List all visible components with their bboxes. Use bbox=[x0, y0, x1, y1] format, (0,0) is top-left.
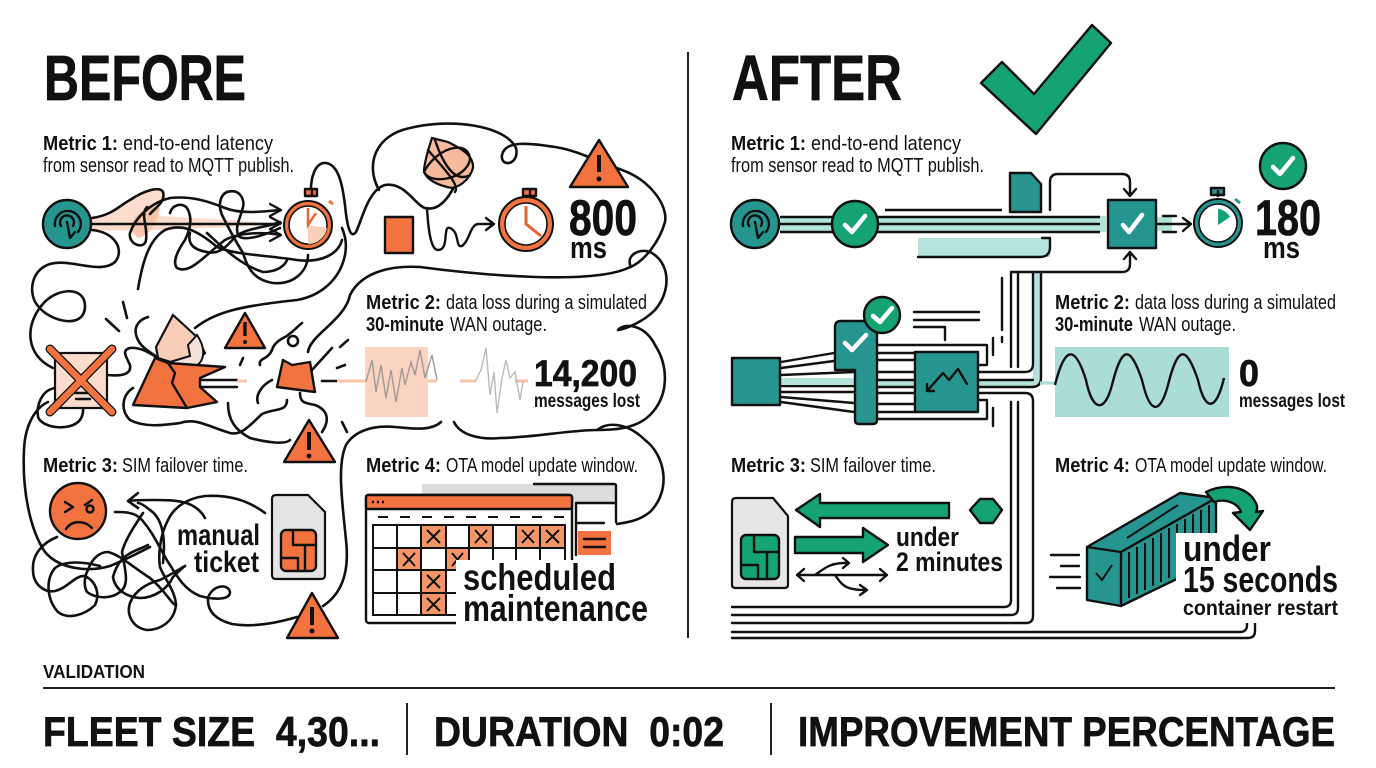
icon: checked square bbox=[1108, 200, 1156, 248]
text: metric 4 label bbox=[1055, 455, 1327, 477]
text: metric 2 label bbox=[366, 292, 647, 336]
tangled wires manual ticket bbox=[33, 493, 297, 630]
icon: source block bbox=[732, 358, 780, 405]
metric: 800 ms: ms bbox=[570, 230, 607, 265]
text: under 15 seconds container restart bbox=[1176, 528, 1346, 623]
icon: SIM card bbox=[272, 495, 325, 579]
text: metric 2 label: 30-minute bbox=[1055, 314, 1133, 336]
icon: diamond bbox=[970, 499, 1002, 523]
tangled wires before bbox=[24, 124, 666, 606]
text: manual ticket: manual bbox=[177, 519, 260, 552]
icon: warning bottom bbox=[287, 593, 338, 638]
text: metric 3 label: Metric 3: bbox=[43, 455, 118, 477]
text: under 15 seconds container restart: under bbox=[1183, 528, 1271, 569]
text: under 15 seconds container restart: 15 seconds bbox=[1183, 559, 1338, 600]
icon: check circle bbox=[832, 201, 878, 247]
text: metric 3 label: SIM failover time. bbox=[810, 455, 936, 477]
icon: stopwatch 2 bbox=[499, 189, 553, 251]
panel: after bbox=[731, 25, 1346, 638]
text: under 15 seconds container restart: container restart bbox=[1183, 597, 1338, 620]
text: metric 2 label: data loss during a simulated bbox=[446, 292, 647, 314]
icon: big check bbox=[981, 25, 1111, 134]
text: metric 1 label: from sensor read to MQTT publish. bbox=[731, 155, 984, 177]
icon: broken fragment bbox=[277, 360, 315, 392]
calendar: scheduled maintenance: maintenance bbox=[463, 588, 648, 629]
icon: sensor bbox=[731, 200, 779, 248]
stat: duration: DURATION 0:02 bbox=[434, 708, 724, 755]
text: metric 2 label: WAN outage. bbox=[1139, 314, 1236, 336]
arrow: failback bbox=[796, 494, 949, 527]
text: metric 2 label: WAN outage. bbox=[450, 314, 547, 336]
icon: warning middle bbox=[225, 313, 265, 348]
text: metric 3 label bbox=[731, 455, 936, 477]
icon: container bbox=[1050, 493, 1216, 606]
text: under 2 minutes: under bbox=[896, 522, 959, 552]
text: metric 2 label: 30-minute bbox=[366, 314, 444, 336]
metric: 800 ms: 800 bbox=[569, 190, 637, 246]
text: metric 4 label: OTA model update window. bbox=[1135, 455, 1327, 477]
arrow wavy to stopwatch bbox=[427, 208, 494, 250]
text: metric 1 label: end-to-end latency bbox=[123, 133, 273, 155]
calendar: scheduled maintenance: scheduled bbox=[463, 557, 616, 598]
text: manual ticket: ticket bbox=[194, 546, 259, 579]
icon: tangled ball bbox=[424, 138, 473, 192]
icon: document bbox=[1010, 173, 1041, 212]
icon: angry face bbox=[50, 483, 106, 539]
icon: crossed box bbox=[50, 349, 112, 412]
network: orchestrated wiring bbox=[732, 252, 1136, 426]
text: metric 1 label bbox=[43, 133, 294, 177]
text: metric 3 label: Metric 3: bbox=[731, 455, 806, 477]
text: metric 1 label: from sensor read to MQTT publish. bbox=[43, 155, 294, 177]
text: metric 4 label: OTA model update window. bbox=[446, 455, 638, 477]
calendar: scheduled maintenance bbox=[366, 484, 656, 630]
footer: validation bbox=[43, 662, 1335, 755]
arrow: failover bbox=[795, 528, 888, 562]
text: metric 4 label: Metric 4: bbox=[1055, 455, 1130, 477]
metric: 0 messages lost: 0 bbox=[1239, 353, 1259, 394]
text: metric 2 label: Metric 2: bbox=[1055, 292, 1130, 314]
metric: 180 ms bbox=[1255, 190, 1321, 265]
stream to stopwatch bbox=[92, 189, 281, 241]
metric: 180 ms: ms bbox=[1263, 230, 1300, 265]
metric: 14,200 messages lost: 14,200 bbox=[534, 353, 637, 394]
heading: BEFORE: BEFORE bbox=[44, 42, 246, 114]
icon: broken pyramid bbox=[133, 315, 247, 408]
text: metric 2 label bbox=[1055, 292, 1336, 336]
text: metric 1 label: end-to-end latency bbox=[811, 133, 961, 155]
text: metric 1 label bbox=[731, 133, 984, 177]
text: metric 3 label bbox=[43, 455, 248, 477]
metric: 180 ms: 180 bbox=[1255, 190, 1321, 246]
text: metric 1 label: Metric 1: bbox=[43, 133, 118, 155]
arrow: restart bbox=[1206, 487, 1263, 530]
icon: orange block bbox=[385, 217, 413, 253]
stat: fleet size: FLEET SIZE 4,30... bbox=[43, 708, 380, 755]
metric: 0 messages lost: messages lost bbox=[1239, 391, 1346, 412]
text: manual ticket bbox=[177, 519, 260, 579]
arrows: switching bbox=[797, 558, 887, 595]
icon: stopwatch 1 bbox=[284, 189, 333, 249]
wires: bus lines bbox=[732, 401, 1255, 638]
text: metric 3 label: SIM failover time. bbox=[122, 455, 248, 477]
metric: 14,200 messages lost bbox=[534, 353, 641, 412]
text: metric 4 label: Metric 4: bbox=[366, 455, 441, 477]
icon: stopwatch bbox=[1194, 188, 1242, 247]
pipeline: clean streams bbox=[780, 174, 1191, 257]
text: metric 1 label: Metric 1: bbox=[731, 133, 806, 155]
chart: sine wave bbox=[1040, 347, 1229, 417]
icon: warning lower bbox=[284, 420, 335, 462]
text: metric 4 label bbox=[366, 455, 638, 477]
text: metric 2 label: Metric 2: bbox=[366, 292, 441, 314]
metric: 0 messages lost bbox=[1239, 353, 1346, 412]
icon: warning top bbox=[570, 140, 628, 187]
heading: AFTER: AFTER bbox=[732, 42, 902, 114]
chart: lossy signal bbox=[337, 347, 528, 417]
text: under 2 minutes: 2 minutes bbox=[896, 547, 1003, 577]
icon: SIM card bbox=[732, 498, 788, 588]
divider: center bbox=[687, 52, 689, 638]
icon: check badge bbox=[1260, 143, 1306, 189]
icon: sensor bbox=[43, 200, 91, 248]
text: under 2 minutes bbox=[896, 522, 1003, 577]
panel: before bbox=[24, 42, 666, 638]
metric: 14,200 messages lost: messages lost bbox=[534, 391, 641, 412]
metric: 800 ms bbox=[569, 190, 637, 265]
label: validation: VALIDATION bbox=[43, 662, 145, 682]
